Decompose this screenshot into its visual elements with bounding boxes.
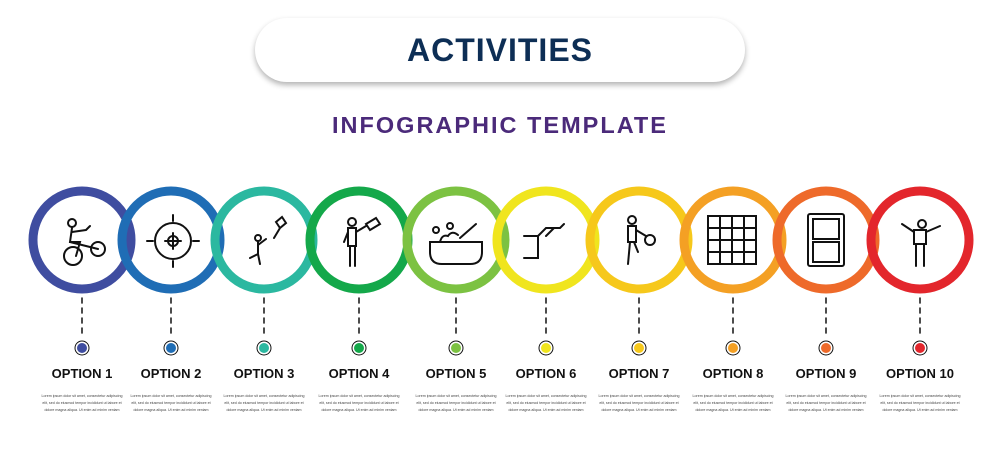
text: dolore magna aliqua. Ut enim ad minim veniam [695, 408, 771, 412]
title: ACTIVITIES [407, 32, 593, 68]
text: dolore magna aliqua. Ut enim ad minim veniam [882, 408, 958, 412]
text: elit, sed do eiusmod tempor incididunt ut labore et [599, 401, 679, 405]
text: dolore magna aliqua. Ut enim ad minim veniam [508, 408, 584, 412]
text: OPTION 5 [426, 366, 486, 381]
text: OPTION 4 [329, 366, 389, 381]
text: OPTION 3 [234, 366, 294, 381]
text: elit, sed do eiusmod tempor incididunt ut labore et [416, 401, 496, 405]
circle 1 [33, 191, 131, 355]
text: Lorem ipsum dolor sit amet, consectetur adipiscing [506, 394, 586, 398]
text: Lorem ipsum dolor sit amet, consectetur adipiscing [42, 394, 122, 398]
text: dolore magna aliqua. Ut enim ad minim veniam [601, 408, 677, 412]
text: dolore magna aliqua. Ut enim ad minim veniam [321, 408, 397, 412]
circle 10 [871, 191, 969, 355]
text: Lorem ipsum dolor sit amet, consectetur adipiscing [319, 394, 399, 398]
text: OPTION 9 [796, 366, 856, 381]
text: OPTION 10 [886, 366, 954, 381]
text: dolore magna aliqua. Ut enim ad minim veniam [226, 408, 302, 412]
text: dolore magna aliqua. Ut enim ad minim veniam [788, 408, 864, 412]
text: dolore magna aliqua. Ut enim ad minim veniam [133, 408, 209, 412]
circle 4 [310, 191, 408, 355]
text: Lorem ipsum dolor sit amet, consectetur adipiscing [416, 394, 496, 398]
text: elit, sed do eiusmod tempor incididunt ut labore et [693, 401, 773, 405]
labels [42, 366, 960, 412]
circle 9 [777, 191, 875, 355]
subtitle: INFOGRAPHIC TEMPLATE [332, 112, 668, 138]
circle 5 [407, 191, 505, 355]
text: elit, sed do eiusmod tempor incididunt ut labore et [786, 401, 866, 405]
text: OPTION 6 [516, 366, 576, 381]
text: elit, sed do eiusmod tempor incididunt ut labore et [131, 401, 211, 405]
circle 6 [497, 191, 595, 355]
circle 7 [590, 191, 688, 355]
text: Lorem ipsum dolor sit amet, consectetur adipiscing [693, 394, 773, 398]
text: OPTION 1 [52, 366, 112, 381]
text: dolore magna aliqua. Ut enim ad minim veniam [418, 408, 494, 412]
text: OPTION 7 [609, 366, 669, 381]
text: elit, sed do eiusmod tempor incididunt ut labore et [319, 401, 399, 405]
text: elit, sed do eiusmod tempor incididunt ut labore et [224, 401, 304, 405]
text: OPTION 8 [703, 366, 763, 381]
circle 3 [215, 191, 313, 355]
text: Lorem ipsum dolor sit amet, consectetur adipiscing [131, 394, 211, 398]
text: Lorem ipsum dolor sit amet, consectetur adipiscing [880, 394, 960, 398]
title [255, 18, 745, 82]
text: elit, sed do eiusmod tempor incididunt ut labore et [42, 401, 122, 405]
text: dolore magna aliqua. Ut enim ad minim veniam [44, 408, 120, 412]
text: Lorem ipsum dolor sit amet, consectetur adipiscing [786, 394, 866, 398]
circle 8 [684, 191, 782, 355]
text: elit, sed do eiusmod tempor incididunt ut labore et [506, 401, 586, 405]
text: Lorem ipsum dolor sit amet, consectetur adipiscing [224, 394, 304, 398]
text: Lorem ipsum dolor sit amet, consectetur adipiscing [599, 394, 679, 398]
text: elit, sed do eiusmod tempor incididunt ut labore et [880, 401, 960, 405]
text: OPTION 2 [141, 366, 201, 381]
circle 2 [122, 191, 220, 355]
